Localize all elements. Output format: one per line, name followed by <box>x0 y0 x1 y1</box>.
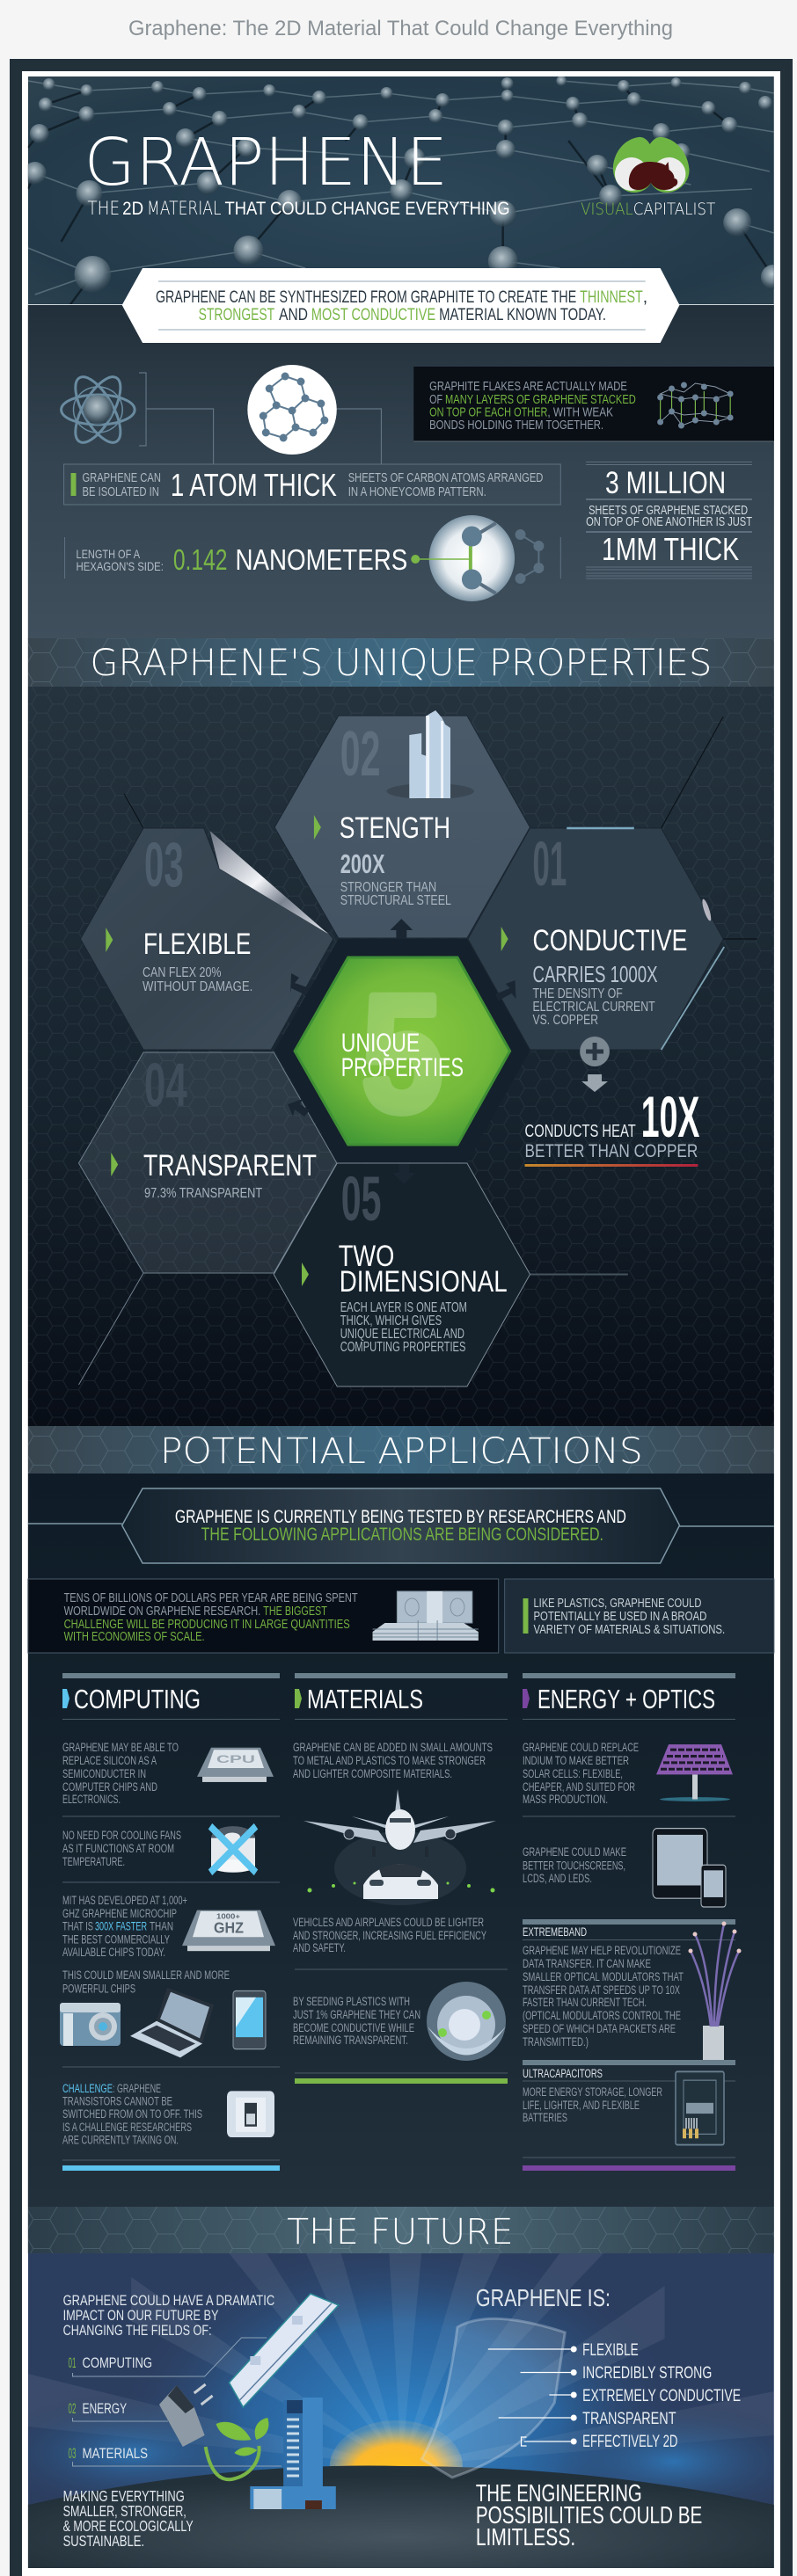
text: composite materials: TO METAL AND PLASTICS TO MAKE STRONGER <box>293 1754 486 1767</box>
heading banner: potential applications: POTENTIAL APPLICATIONS <box>160 1431 643 1472</box>
text: solar cells: INDIUM TO MAKE BETTER <box>523 1754 629 1767</box>
icon: GHz chip <box>182 1910 275 1951</box>
center hexagon: 5 unique properties: PROPERTIES <box>341 1053 464 1082</box>
heading: graphene is: GRAPHENE IS: <box>476 2284 611 2311</box>
hexagon 02: strength: 02 <box>340 719 380 790</box>
connecting lines <box>78 717 757 1385</box>
panel: hexagon side length: HEXAGON'S SIDE: <box>76 559 164 573</box>
hexagon 02: strength: STRONGER THAN <box>340 880 436 895</box>
center hexagon: 5 unique properties: 5 <box>362 961 442 1146</box>
icon: CPU <box>197 1748 274 1782</box>
panel: 1 atom thick: BE ISOLATED IN <box>82 485 159 499</box>
icon: smartphone <box>233 1990 266 2049</box>
column heading: ENERGY + OPTICS <box>537 1684 715 1714</box>
hexagon 01: conductive <box>468 828 724 1050</box>
callout: conducts heat 10x: CONDUCTS HEAT <box>525 1122 636 1141</box>
callout: white intro banner: THINNEST <box>580 287 643 307</box>
callout: conducts heat 10x: 10X <box>641 1084 699 1149</box>
hexagon 04: transparent: TRANSPARENT <box>143 1149 317 1182</box>
text: cooling fans <box>62 1829 181 1868</box>
icon: crossed-out fan <box>210 1826 256 1873</box>
logo: Visual Capitalist: VISUAL <box>581 200 633 219</box>
hexagon 02: strength: 200X <box>340 848 385 879</box>
hexagon 01: conductive: ELECTRICAL CURRENT <box>532 1000 655 1015</box>
list: graphene properties: TRANSPARENT <box>582 2410 676 2428</box>
subtitle: MATERIAL <box>147 198 222 219</box>
background: applications <box>28 1474 774 2207</box>
panel: hexagon side length: 0.142 <box>173 543 227 576</box>
hexagon 01: conductive: THE DENSITY OF <box>532 986 623 1001</box>
text: touchscreens: BETTER TOUCHSCREENS, <box>523 1859 625 1873</box>
panel: plastics comparison: VARIETY OF MATERIALS & SITUATIONS. <box>533 1622 725 1637</box>
text: challenge: SWITCHED FROM ON TO OFF. THIS <box>62 2107 202 2121</box>
icon: transparent graphene sheet <box>421 2318 565 2478</box>
panel: graphite flakes: ON TOP OF EACH OTHER <box>429 405 547 420</box>
icon: graphene sphere <box>427 1982 506 2061</box>
text: extremeband: GRAPHENE MAY HELP REVOLUTIONIZE <box>523 1944 681 1957</box>
callout: white intro banner: MOST CONDUCTIVE <box>311 305 435 324</box>
text: ultracapacitors: MORE ENERGY STORAGE, LONGER <box>523 2085 662 2099</box>
panel: graphite flakes: GRAPHITE FLAKES ARE ACTUALLY MADE <box>429 380 627 394</box>
text: extremeband: SMALLER OPTICAL MODULATORS THAT <box>523 1970 684 1983</box>
text: ultracapacitors: LIFE, LIGHTER, AND FLEXIBLE <box>523 2099 640 2112</box>
panel: graphite flakes <box>413 367 774 441</box>
text: composite materials: AND LIGHTER COMPOSITE MATERIALS. <box>293 1767 452 1780</box>
hexagon 01: conductive: CONDUCTIVE <box>532 924 687 957</box>
subtitle: THE <box>87 198 120 219</box>
text: seeding plastics: REMAINING TRANSPARENT. <box>293 2034 408 2047</box>
column heading <box>295 1673 508 1720</box>
hexagon 01: conductive: 01 <box>532 830 567 899</box>
text: cooling fans: TEMPERATURE. <box>62 1855 125 1868</box>
list: fields: 01 <box>69 2354 76 2371</box>
text: replace silicon <box>62 1741 179 1806</box>
panel: hexagon side length: LENGTH OF A <box>76 547 141 561</box>
panel: 3 million sheets: 3 MILLION <box>605 466 726 500</box>
text: composite materials: GRAPHENE CAN BE ADDED IN SMALL AMOUNTS <box>293 1741 493 1754</box>
icon: RAM module <box>229 2294 339 2407</box>
panel: 1 atom thick <box>64 464 560 505</box>
scene background with sunrise <box>28 2253 774 2568</box>
text: extremeband: TRANSMITTED.) <box>523 2035 589 2048</box>
callout: white intro banner: MATERIAL KNOWN TODAY. <box>439 305 606 324</box>
text: ultracapacitors <box>523 2060 735 2124</box>
page title: Graphene: The 2D Material That Could Change Everything <box>128 17 673 40</box>
text: engineering possibilities: THE ENGINEERING <box>476 2479 642 2507</box>
text: extremeband: DATA TRANSFER. IT CAN MAKE <box>523 1957 651 1970</box>
text: dramatic impact <box>63 2292 274 2339</box>
text: MIT microchip: THAT IS <box>62 1920 93 1932</box>
text: extremeband: TRANSFER DATA AT SPEEDS UP TO 10X <box>523 1983 680 1997</box>
text: engineering possibilities: POSSIBILITIES COULD BE <box>476 2501 702 2529</box>
text: smaller chips <box>62 1968 230 1996</box>
icon: atom <box>62 370 381 464</box>
text: replace silicon: COMPUTER CHIPS AND <box>62 1780 157 1794</box>
text: composite materials <box>293 1741 493 1780</box>
icon: building <box>250 2398 336 2509</box>
panel: research funding: THE BIGGEST <box>263 1604 327 1619</box>
icon: honeycomb molecule <box>247 365 337 455</box>
text: challenge: IS A CHALLENGE RESEARCHERS <box>62 2121 192 2134</box>
text: smaller chips: POWERFUL CHIPS <box>62 1982 135 1996</box>
subtitle <box>87 198 510 219</box>
text: MIT microchip: 300X FASTER <box>95 1920 147 1932</box>
panel: research funding: CHALLENGE WILL BE PRODUCING IT IN LARGE QUANTITIES <box>64 1617 350 1632</box>
callout: researchers testing <box>28 1488 774 1563</box>
hexagon 05: two dimensional <box>274 1163 530 1386</box>
text: seeding plastics: BECOME CONDUCTIVE WHILE <box>293 2021 414 2034</box>
hexagon 02: strength: STENGTH <box>340 811 450 845</box>
text: replace silicon: ELECTRONICS. <box>62 1793 121 1806</box>
column heading <box>523 1673 735 1720</box>
text: cooling fans: NO NEED FOR COOLING FANS <box>62 1829 181 1842</box>
text: making everything <box>63 2487 194 2550</box>
hexagon 02: strength: STRUCTURAL STEEL <box>340 893 451 908</box>
column heading: COMPUTING <box>74 1684 201 1714</box>
icon: GHz chip: GHZ <box>214 1920 244 1937</box>
callout: white intro banner: STRONGEST <box>199 305 274 324</box>
icon: plus and down arrow <box>580 1037 610 1092</box>
heading banner: potential applications <box>28 1426 774 1474</box>
hexagon 03: flexible <box>80 828 333 1050</box>
icon: laptop <box>130 1988 214 2057</box>
text: replace silicon: GRAPHENE MAY BE ABLE TO <box>62 1741 179 1754</box>
subtitle: THAT COULD CHANGE EVERYTHING <box>225 199 510 219</box>
text: vehicles <box>293 1916 486 1954</box>
text: challenge: TRANSISTORS CANNOT BE <box>62 2094 172 2108</box>
icon: switch <box>227 2091 274 2137</box>
heading banner: Graphene's unique properties: GRAPHENE'S UNIQUE PROPERTIES <box>90 641 712 684</box>
section: unique properties <box>28 638 774 1426</box>
icon: money stacks <box>373 1591 479 1641</box>
text: engineering possibilities <box>476 2479 702 2551</box>
hexagon 04: transparent: 04 <box>144 1051 187 1119</box>
section: potential applications intro <box>28 1426 774 2207</box>
text: MIT microchip: THE BEST COMMERCIALLY <box>62 1932 170 1947</box>
hexagon 03: flexible: CAN FLEX 20% <box>143 965 222 980</box>
callout: white intro banner: AND <box>279 305 308 324</box>
list: fields: 02 <box>69 2400 76 2417</box>
hero: molecular lattice image <box>24 76 786 305</box>
icon: CPU: CPU <box>216 1754 255 1765</box>
center hexagon: 5 unique properties: UNIQUE <box>341 1029 420 1058</box>
text: challenge: CHALLENGE <box>62 2082 113 2095</box>
panel: research funding: TENS OF BILLIONS OF DOLLARS PER YEAR ARE BEING SPENT <box>64 1590 358 1605</box>
list: fields: 03 <box>69 2445 76 2462</box>
icon: bond length diagram <box>411 515 544 601</box>
column: materials <box>293 1673 508 2084</box>
hexagon 03: flexible: FLEXIBLE <box>143 928 251 961</box>
text: ultracapacitors: ULTRACAPACITORS <box>523 2067 603 2080</box>
list: fields: COMPUTING <box>82 2354 152 2371</box>
column heading: MATERIALS <box>307 1684 423 1714</box>
text: MIT microchip: THAN <box>150 1920 173 1932</box>
section: the future <box>0 2207 797 2576</box>
hexagon 03: flexible: 03 <box>144 831 184 900</box>
text: seeding plastics <box>293 1995 420 2047</box>
list: fields: ENERGY <box>82 2400 127 2417</box>
panel: research funding: WORLDWIDE ON GRAPHENE RESEARCH. <box>64 1604 260 1619</box>
icon: GHz chip: 1000+ <box>216 1912 241 1921</box>
text: seeding plastics: JUST 1% GRAPHENE THEY CAN <box>293 2008 420 2021</box>
list: graphene properties: INCREDIBLY STRONG <box>582 2364 712 2383</box>
callout: white intro banner: , <box>643 287 647 307</box>
icon: battery <box>676 2071 724 2145</box>
panel: graphite flakes: , WITH WEAK <box>547 405 613 420</box>
column: computing <box>60 1673 280 2171</box>
panel: research funding: WITH ECONOMIES OF SCALE. <box>64 1629 205 1644</box>
panel: research funding <box>28 1579 499 1653</box>
text: making everything: SUSTAINABLE. <box>63 2532 144 2550</box>
panel: 3 million sheets <box>586 462 752 579</box>
icon: fiber optics <box>688 1922 741 2060</box>
text: touchscreens: GRAPHENE COULD MAKE <box>523 1845 626 1859</box>
text: challenge: : GRAPHENE <box>113 2082 161 2095</box>
text: smaller chips: THIS COULD MEAN SMALLER AND MORE <box>62 1968 230 1982</box>
text: vehicles: AND STRONGER, INCREASING FUEL EFFICIENCY <box>293 1929 486 1942</box>
hexagon 03: flexible: WITHOUT DAMAGE. <box>143 979 252 994</box>
callout: researchers testing: THE FOLLOWING APPLICATIONS ARE BEING CONSIDERED. <box>201 1524 603 1545</box>
text: solar cells: GRAPHENE COULD REPLACE <box>523 1741 639 1754</box>
hexagon 04: transparent: 97.3% TRANSPARENT <box>144 1186 263 1201</box>
background: intro area <box>28 305 774 639</box>
panel: plastics comparison: POTENTIALLY BE USED IN A BROAD <box>533 1609 706 1624</box>
text: MIT microchip <box>62 1894 187 1959</box>
text: replace silicon: SEMICONDUCTER IN <box>62 1767 146 1780</box>
text: solar cells <box>523 1741 639 1806</box>
text: challenge: ARE CURRENTLY TAKING ON. <box>62 2133 179 2147</box>
panel: graphite flakes: BONDS HOLDING THEM TOGETHER. <box>429 418 603 433</box>
icon: charger with stem and leaf <box>159 2384 268 2479</box>
list: fields: MATERIALS <box>82 2445 148 2462</box>
text: making everything: & MORE ECOLOGICALLY <box>63 2517 194 2535</box>
panel: graphite flakes: MANY LAYERS OF GRAPHENE STACKED <box>445 393 636 407</box>
heading banner: the future: THE FUTURE <box>287 2212 514 2252</box>
text: extremeband: (OPTICAL MODULATORS CONTROL THE <box>523 2009 681 2022</box>
text: seeding plastics: BY SEEDING PLASTICS WITH <box>293 1995 410 2008</box>
hexagon 05: two dimensional: UNIQUE ELECTRICAL AND <box>340 1327 464 1342</box>
icon: solar panel <box>656 1744 733 1801</box>
logo: Visual Capitalist <box>581 137 716 219</box>
list: graphene properties: EFFECTIVELY 2D <box>582 2433 678 2451</box>
panel: 1 atom thick: 1 ATOM THICK <box>171 468 337 503</box>
text: cooling fans: AS IT FUNCTIONS AT ROOM <box>62 1842 174 1855</box>
icon: peeled corner <box>210 831 328 934</box>
text: solar cells: SOLAR CELLS: FLEXIBLE, <box>523 1767 623 1780</box>
hexagon 05: two dimensional: COMPUTING PROPERTIES <box>340 1340 465 1355</box>
text: extremeband: FASTER THAN CURRENT TECH. <box>523 1996 647 2009</box>
text: MIT microchip: MIT HAS DEVELOPED AT 1,000+ <box>62 1894 187 1907</box>
text: dramatic impact: IMPACT ON OUR FUTURE BY <box>63 2307 219 2324</box>
hexagon 05: two dimensional: 05 <box>341 1165 381 1234</box>
text: touchscreens: LCDS, AND LEDS. <box>523 1872 592 1885</box>
text: extremeband <box>523 1919 735 2048</box>
text: challenge <box>62 2082 202 2147</box>
heading: GRAPHENE: GRAPHENE <box>84 126 448 200</box>
hexagon 05: two dimensional: DIMENSIONAL <box>340 1265 508 1299</box>
hexagon 04: transparent <box>78 1051 337 1273</box>
text: extremeband: EXTREMEBAND <box>523 1925 587 1939</box>
panel: graphite flakes: OF <box>429 393 442 407</box>
text: making everything: SMALLER, STRONGER, <box>63 2502 186 2520</box>
panel: plastics comparison: LIKE PLASTICS, GRAPHENE COULD <box>533 1596 701 1611</box>
callout: white intro banner: GRAPHENE CAN BE SYNTHESIZED FROM GRAPHITE TO CREATE THE <box>156 287 576 307</box>
text: making everything: MAKING EVERYTHING <box>63 2487 185 2505</box>
logo: Visual Capitalist: CAPITALIST <box>633 200 716 219</box>
text: touchscreens <box>523 1845 626 1885</box>
callout: conducts heat 10x: BETTER THAN COPPER <box>525 1141 698 1161</box>
text: engineering possibilities: LIMITLESS. <box>476 2523 575 2551</box>
text: solar cells: CHEAPER, AND SUITED FOR <box>523 1780 635 1794</box>
text: ultracapacitors: BATTERIES <box>523 2111 567 2124</box>
background: properties <box>28 687 774 1426</box>
panel: 3 million sheets: 1MM THICK <box>602 532 739 567</box>
column heading <box>62 1673 280 1720</box>
panel: hexagon side length: NANOMETERS <box>235 543 407 576</box>
text: solar cells: MASS PRODUCTION. <box>523 1793 608 1806</box>
icon: graphite layers <box>657 382 734 429</box>
list: graphene properties: FLEXIBLE <box>582 2341 639 2360</box>
hexagon 02: strength <box>274 710 530 938</box>
text: vehicles: AND SAFETY. <box>293 1941 346 1954</box>
arrows from center hexagon <box>288 919 516 1184</box>
hexagon 01: conductive: VS. COPPER <box>532 1013 598 1028</box>
panel: 1 atom thick: GRAPHENE CAN <box>82 471 161 485</box>
hexagon 05: two dimensional: TWO <box>339 1240 394 1273</box>
hexagon 01: conductive: CARRIES 1000X <box>532 963 658 987</box>
column: energy and optics <box>523 1673 741 2171</box>
callout: researchers testing: GRAPHENE IS CURRENTLY BEING TESTED BY RESEARCHERS AND <box>175 1507 626 1527</box>
text: replace silicon: REPLACE SILICON AS A <box>62 1754 157 1767</box>
icon: airplane and car <box>303 1789 496 1905</box>
heading banner: the future <box>28 2207 774 2253</box>
section: hero and intro facts <box>24 76 786 639</box>
text: dramatic impact: GRAPHENE COULD HAVE A DRAMATIC <box>63 2292 274 2309</box>
icon: skyscraper <box>386 710 474 799</box>
panel: plastics comparison <box>505 1579 774 1653</box>
callout: conducts heat 10x <box>525 1084 699 1167</box>
panel: 1 atom thick: IN A HONEYCOMB PATTERN. <box>348 485 486 499</box>
list: fields <box>69 2338 282 2466</box>
text: MIT microchip: AVAILABLE CHIPS TODAY. <box>62 1946 165 1959</box>
icon: camera <box>60 2003 121 2046</box>
panel: hexagon side length <box>65 515 560 601</box>
text: extremeband: SPEED OF WHICH DATA PACKETS ARE <box>523 2022 676 2035</box>
text: MIT microchip: GHZ GRAPHENE MICROCHIP <box>62 1907 177 1920</box>
hexagon 05: two dimensional: THICK, WHICH GIVES <box>340 1313 442 1328</box>
list: graphene properties: EXTREMELY CONDUCTIVE <box>582 2387 741 2405</box>
text: vehicles: VEHICLES AND AIRPLANES COULD BE LIGHTER <box>293 1916 484 1929</box>
text: dramatic impact: CHANGING THE FIELDS OF: <box>63 2322 212 2339</box>
callout: white intro banner <box>122 268 679 343</box>
icon: tablet and phone <box>653 1829 726 1907</box>
subtitle: 2D <box>122 199 143 219</box>
list: graphene properties <box>488 2341 741 2451</box>
hexagon 05: two dimensional: EACH LAYER IS ONE ATOM <box>340 1300 467 1315</box>
center hexagon: 5 unique properties <box>274 939 530 1162</box>
panel: 1 atom thick: SHEETS OF CARBON ATOMS ARRANGED <box>348 471 543 485</box>
